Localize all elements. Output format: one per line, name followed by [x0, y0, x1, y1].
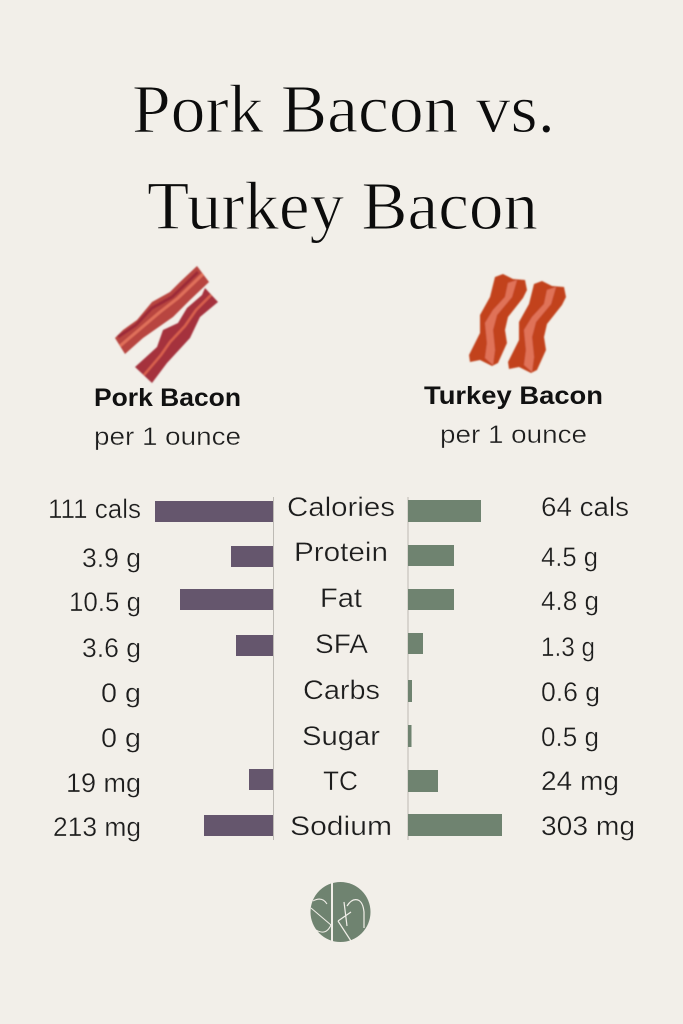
title: Pork Bacon vs.: [132, 71, 555, 147]
title: Turkey Bacon: [147, 168, 538, 244]
heading: turkey bacon: [424, 382, 603, 449]
pork bacon values: 10.5 g: [69, 587, 141, 617]
heading: pork bacon: per 1 ounce: [94, 423, 241, 451]
heading: pork bacon: Pork Bacon: [94, 384, 241, 412]
pork bacon values: 19 mg: [66, 768, 141, 798]
logo: [310, 880, 370, 944]
turkey bacon values: 4.5 g: [541, 542, 598, 572]
nutrient labels: Calories: [287, 492, 395, 522]
pork bacon values: [48, 494, 141, 842]
icon: pork bacon: [115, 266, 218, 383]
nutrient labels: Sodium: [290, 811, 392, 841]
pork bacon values: 0 g: [101, 678, 141, 708]
turkey bacon values: 0.6 g: [541, 677, 600, 707]
turkey bacon values: [541, 492, 635, 841]
pork bacon values: 213 mg: [53, 812, 141, 842]
title: [132, 71, 555, 244]
turkey bacon values: 4.8 g: [541, 586, 599, 616]
turkey bacon values: 1.3 g: [541, 632, 595, 662]
pork bacon values: 0 g: [101, 723, 141, 753]
heading: turkey bacon: per 1 ounce: [440, 421, 587, 449]
turkey bacon values: 0.5 g: [541, 722, 599, 752]
turkey bacon values: 303 mg: [541, 811, 635, 841]
heading: pork bacon: [94, 384, 241, 451]
pork bacon bars: [155, 501, 273, 836]
nutrient labels: Fat: [320, 583, 363, 613]
nutrient labels: Carbs: [303, 675, 380, 705]
nutrient labels: SFA: [315, 629, 368, 659]
nutrient labels: TC: [323, 766, 358, 796]
icon: turkey bacon: [469, 274, 566, 373]
pork bacon values: 3.6 g: [82, 633, 141, 663]
nutrient labels: Protein: [294, 537, 388, 567]
turkey bacon values: 64 cals: [541, 492, 629, 522]
axis lines: [273, 497, 408, 840]
pork bacon values: 3.9 g: [82, 543, 141, 573]
pork bacon values: 111 cals: [48, 494, 141, 524]
heading: turkey bacon: Turkey Bacon: [424, 382, 603, 410]
nutrient labels: [287, 492, 395, 841]
turkey bacon values: 24 mg: [541, 766, 619, 796]
nutrient labels: Sugar: [302, 721, 380, 751]
turkey bacon bars: [408, 500, 502, 836]
